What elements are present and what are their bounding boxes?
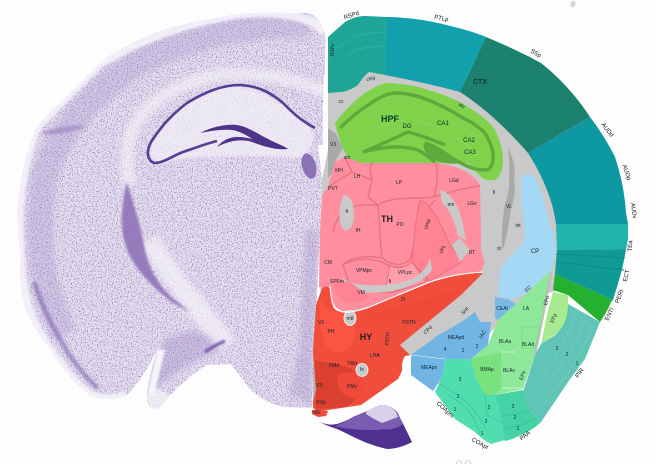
atlas abbreviations: CA3 xyxy=(464,150,476,156)
atlas abbreviations: AUDd xyxy=(599,122,614,139)
fiber tract labels: cing xyxy=(366,75,376,83)
atlas abbreviations: fr xyxy=(345,209,349,215)
LD/VPM darker xyxy=(412,200,462,281)
gray fiber pockets xyxy=(340,195,354,230)
atlas abbreviations: LHA xyxy=(370,353,381,359)
region: AUD xyxy=(528,117,628,224)
atlas abbreviations: BMAp xyxy=(480,367,494,373)
panel: Nissl stained hemisphere xyxy=(0,0,412,449)
dentate gyrus xyxy=(363,132,445,152)
hypothalamic labels: ZI xyxy=(401,297,405,303)
atlas abbreviations: int xyxy=(515,223,521,229)
atlas abbreviations: BLAa xyxy=(499,339,511,345)
atlas abbreviations: 2 xyxy=(488,405,491,411)
mammillothalamic tract xyxy=(344,310,356,326)
stray marks xyxy=(456,0,577,464)
atlas abbreviations: LP xyxy=(396,180,403,186)
atlas abbreviations: 1 xyxy=(576,361,579,367)
region: PERI and ENTl xyxy=(553,274,613,322)
region: EPd xyxy=(541,292,568,344)
dentate gyrus xyxy=(200,125,288,149)
atlas abbreviations: VPL xyxy=(439,244,448,255)
outer labels: RSPd xyxy=(343,11,360,21)
atlas abbreviations: 4 xyxy=(444,347,447,353)
atlas abbreviations: LGv xyxy=(467,201,477,207)
atlas abbreviations: EPv xyxy=(519,370,528,381)
atlas abbreviations: PMd xyxy=(329,363,339,369)
atlas abbreviations: DG xyxy=(402,124,412,130)
region: isocortex xyxy=(328,16,628,322)
atlas abbreviations: em xyxy=(448,202,454,208)
atlas abbreviations: PMv xyxy=(347,384,358,390)
gray white matter base xyxy=(320,40,585,358)
atlas abbreviations: mtt xyxy=(347,316,354,322)
atlas abbreviations: RT xyxy=(469,250,475,256)
atlas abbreviations: AUDp xyxy=(621,164,631,182)
dark lateral band xyxy=(122,182,190,312)
atlas abbreviations: RSPv xyxy=(330,43,336,56)
atlas abbreviations: HPF xyxy=(381,114,400,124)
atlas abbreviations: 1 xyxy=(517,426,520,432)
thalamic labels: MH xyxy=(335,168,343,174)
atlas abbreviations: 3 xyxy=(512,404,515,410)
atlas abbreviations: fx xyxy=(360,367,364,373)
atlas abbreviations: PAA xyxy=(519,430,532,442)
hippocampal interior xyxy=(150,85,313,162)
atlas abbreviations: TMd xyxy=(347,361,357,367)
atlas abbreviations: ECT xyxy=(623,269,631,282)
hippocampus pyramidal layer xyxy=(148,85,315,163)
atlas abbreviations: SHI xyxy=(460,306,470,316)
atlas abbreviations: fi xyxy=(389,279,391,285)
atlas abbreviations: CEAl xyxy=(496,306,508,312)
atlas abbreviations: ENTl xyxy=(605,307,616,322)
atlas abbreviations: PSTN xyxy=(384,332,392,346)
pale outer margin xyxy=(19,13,325,399)
atlas abbreviations: V3 xyxy=(318,320,324,326)
region: PTLp xyxy=(385,17,486,92)
atlas abbreviations xyxy=(313,11,637,451)
region: medial amygdala xyxy=(410,312,491,391)
region: cortical amygdala xyxy=(435,359,505,444)
region: hypothalamus xyxy=(312,273,483,417)
atlas abbreviations: VM xyxy=(357,290,365,296)
atlas abbreviations: st xyxy=(497,246,502,252)
atlas abbreviations: 2 xyxy=(566,352,569,358)
atlas abbreviations: IAC xyxy=(478,329,488,340)
CA pyramidal layer xyxy=(340,93,493,170)
region: piriform xyxy=(523,304,600,422)
region: TEa xyxy=(556,224,628,250)
atlas abbreviations: 2 xyxy=(476,344,479,350)
atlas abbreviations: PH xyxy=(328,329,335,335)
atlas abbreviations: PSTN xyxy=(402,320,416,326)
atlas abbreviations: 3 xyxy=(556,346,559,352)
atlas abbreviations: AUDv xyxy=(629,203,637,219)
atlas abbreviations: sm xyxy=(344,155,350,161)
atlas abbreviations: MEApv xyxy=(421,365,438,371)
lateral ventricle xyxy=(502,147,515,250)
atlas abbreviations: COApl xyxy=(470,437,489,451)
external capsule gap xyxy=(148,349,165,395)
region: PAA xyxy=(495,390,541,441)
atlas abbreviations: fi xyxy=(493,190,495,196)
basal nucleus (ventral purple structure) xyxy=(320,405,412,449)
amygdala and striatum labels: CP xyxy=(531,249,539,255)
atlas abbreviations: LA xyxy=(523,306,530,312)
atlas abbreviations: LH xyxy=(354,174,361,180)
basal amygdala streak xyxy=(205,341,225,352)
region: caudoputamen xyxy=(498,174,556,299)
atlas abbreviations: EC xyxy=(524,284,533,294)
atlas abbreviations: BLAv xyxy=(503,368,515,374)
atlas abbreviations: EPd xyxy=(549,313,559,324)
atlas abbreviations: V3 xyxy=(316,383,322,389)
atlas abbreviations: 2 xyxy=(514,415,517,421)
atlas abbreviations: alv xyxy=(457,102,466,111)
atlas abbreviations: PVp xyxy=(316,400,326,406)
atlas abbreviations: CM xyxy=(324,260,332,266)
region: hippocampal formation xyxy=(335,83,503,180)
atlas abbreviations: TH xyxy=(381,214,393,224)
Nissl speckle xyxy=(18,12,326,408)
panel: annotated atlas hemisphere xyxy=(312,11,637,451)
atlas abbreviations: V3 xyxy=(330,142,336,148)
atlas abbreviations: IH xyxy=(356,228,361,234)
nuclear boundaries xyxy=(328,157,480,265)
atlas abbreviations: VL xyxy=(506,204,512,210)
region: central amygdala xyxy=(495,297,516,320)
atlas abbreviations: 1 xyxy=(462,348,465,354)
atlas abbreviations: BLAd xyxy=(522,342,534,348)
third ventricle xyxy=(328,128,343,178)
atlas abbreviations: CA2 xyxy=(463,138,475,144)
cortex tint xyxy=(40,25,310,335)
atlas abbreviations: PTLp xyxy=(434,15,449,24)
atlas abbreviations: 1 xyxy=(454,407,457,413)
atlas abbreviations: 3 xyxy=(459,377,462,383)
piriform dark layer xyxy=(34,282,98,388)
atlas abbreviations: COApm xyxy=(435,401,455,420)
atlas abbreviations: 1 xyxy=(481,431,484,437)
white matter around hippocampus xyxy=(127,74,325,185)
atlas abbreviations: LGd xyxy=(449,178,459,184)
atlas abbreviations: MEApd xyxy=(448,335,464,341)
atlas abbreviations: 2 xyxy=(457,394,460,400)
region: thalamus xyxy=(319,157,485,311)
atlas abbreviations: cc xyxy=(338,99,344,105)
atlas abbreviations: SPFm xyxy=(330,279,344,285)
amygdala tint xyxy=(150,331,225,395)
midline hypothalamus tint xyxy=(290,230,318,405)
atlas abbreviations: EPd xyxy=(543,295,551,306)
fornix xyxy=(356,364,368,376)
atlas abbreviations: PIR xyxy=(575,367,586,379)
atlas abbreviations: TEa xyxy=(628,240,634,252)
fimbria gland xyxy=(302,153,316,179)
region: SSp xyxy=(460,37,590,153)
atlas abbreviations: VPLpc xyxy=(398,270,413,276)
atlas abbreviations: PVT xyxy=(328,186,338,192)
atlas abbreviations: CA1 xyxy=(437,121,449,127)
atlas abbreviations: 2 xyxy=(485,419,488,425)
region: RSP xyxy=(328,16,386,93)
atlas abbreviations: VPMpc xyxy=(356,268,373,274)
atlas abbreviations: PERI xyxy=(615,289,625,304)
medial lemniscus gray xyxy=(342,258,432,293)
atlas abbreviations: CPd xyxy=(423,325,434,336)
median eminence xyxy=(312,410,328,417)
atlas abbreviations: ME xyxy=(313,410,321,416)
atlas abbreviations: SSp xyxy=(529,49,542,60)
atlas abbreviations: VPM xyxy=(423,219,433,231)
region labels: CTX xyxy=(473,79,487,86)
region: basolateral amygdala xyxy=(471,270,551,395)
atlas abbreviations: PO xyxy=(396,222,404,228)
atlas abbreviations: HY xyxy=(360,332,372,342)
region: ECT xyxy=(555,249,626,300)
